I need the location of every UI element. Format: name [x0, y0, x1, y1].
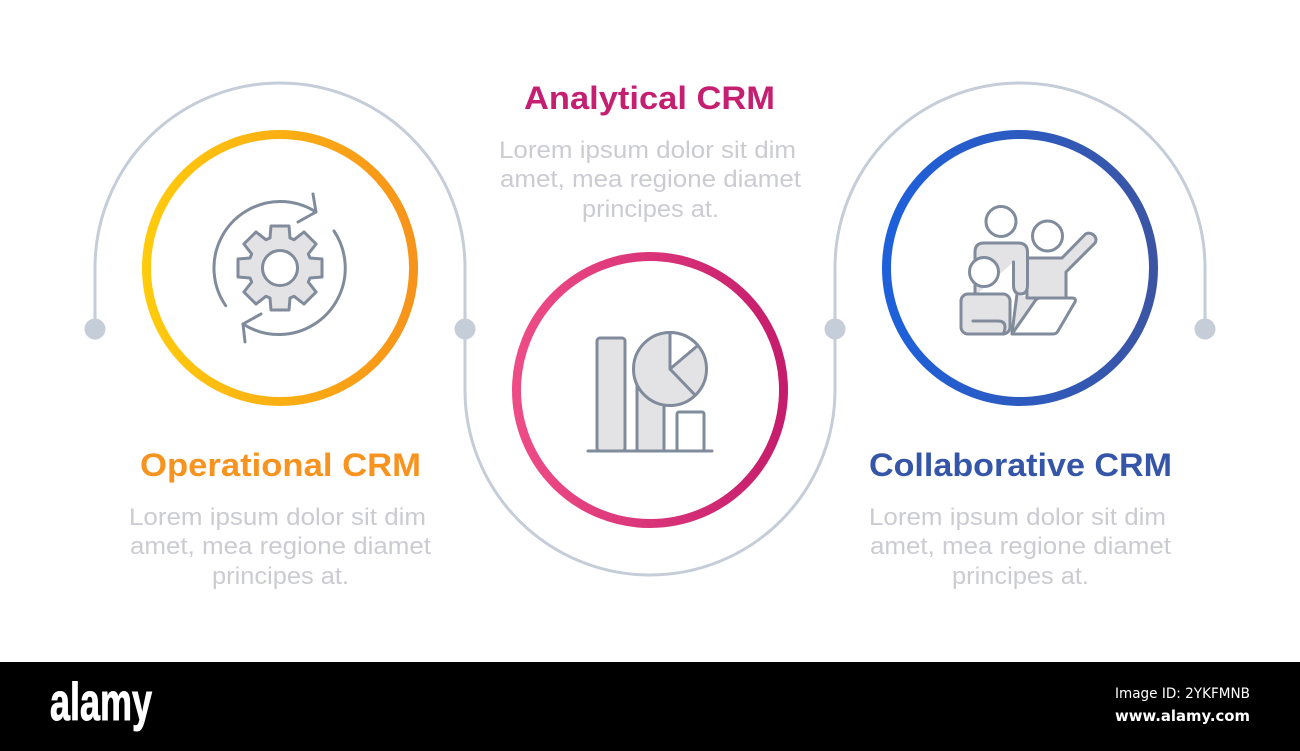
ring: collaborative [886, 134, 1154, 402]
icon: team of people with laptop [961, 206, 1096, 334]
text block: operational description [129, 504, 431, 590]
text block: operational description: amet, mea regione diamet [130, 533, 431, 560]
icon: gear with cycle arrows [214, 194, 345, 342]
text block: analytical description: amet, mea regione diamet [500, 166, 801, 193]
text block: collaborative description: Lorem ipsum dolor sit dim [869, 504, 1166, 531]
text block: collaborative description [869, 504, 1171, 590]
image id: Image ID: 2YKFMNB [1115, 686, 1250, 702]
text block: operational description: principes at. [212, 563, 349, 590]
logo wordmark: alamy [50, 673, 152, 732]
heading: Analytical CRM: Analytical CRM [524, 80, 775, 116]
text block: collaborative description: amet, mea regione diamet [870, 533, 1171, 560]
ring: operational [146, 134, 414, 402]
text block: collaborative description: principes at. [952, 563, 1089, 590]
icon: bar chart with pie [588, 332, 712, 451]
text block: analytical description: principes at. [582, 196, 719, 223]
heading: Collaborative CRM: Collaborative CRM [869, 447, 1172, 483]
heading: Operational CRM: Operational CRM [140, 447, 421, 483]
ring: analytical [516, 256, 784, 524]
website: www.alamy.com [1115, 707, 1250, 725]
connector line with dots [84, 83, 1216, 575]
text block: analytical description [499, 137, 801, 223]
text block: analytical description: Lorem ipsum dolor sit dim [499, 137, 796, 164]
text block: operational description: Lorem ipsum dolor sit dim [129, 504, 426, 531]
footer bar [0, 662, 1300, 751]
